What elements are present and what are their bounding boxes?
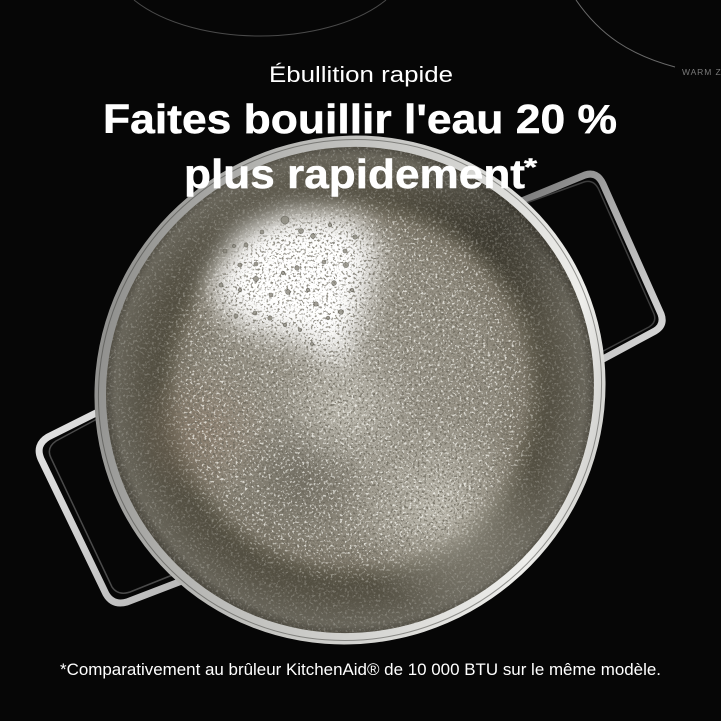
heading: plus rapidement [184,151,525,197]
burner label: WARM Z [682,67,721,77]
bright reflection [208,212,380,368]
heading: Faites bouillir l'eau 20 % [103,96,617,142]
burner outline: centre top [134,0,386,36]
burner outline: top right [576,0,675,67]
subtitle: Ébullition rapide [269,62,453,87]
heading [103,96,617,197]
pot handle: right [512,174,662,366]
pot [94,136,606,644]
footnote: *Comparativement au brûleur KitchenAid® de 10 000 BTU sur le même modèle. [60,661,661,679]
heading: * [524,154,538,181]
bubbles [219,216,357,346]
pot handle: left [39,406,200,603]
pot interior with boiling water [100,140,600,640]
